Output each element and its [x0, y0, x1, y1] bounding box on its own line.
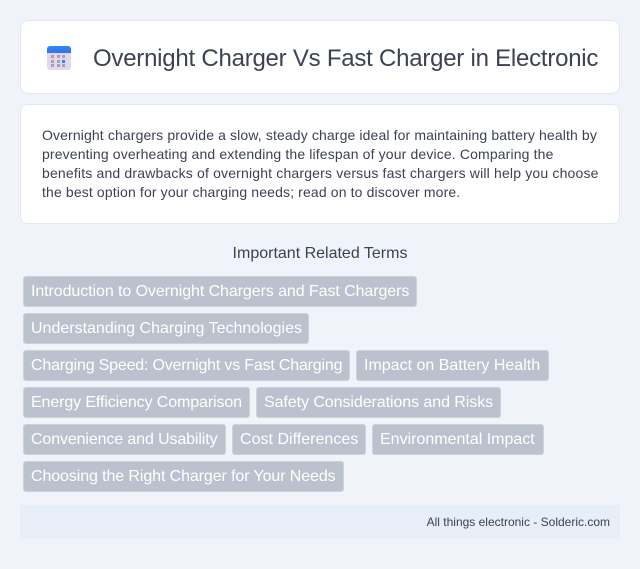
tag: Safety Considerations and Risks: [264, 394, 493, 411]
tag: [356, 350, 549, 381]
tag: Energy Efficiency Comparison: [31, 394, 242, 411]
tag: [232, 424, 366, 455]
tag: [23, 276, 417, 307]
panel: header: [20, 20, 620, 94]
tag: Introduction to Overnight Chargers and Fast Chargers: [31, 283, 409, 300]
tag list: [23, 276, 549, 492]
tag: [23, 461, 344, 492]
tag: Convenience and Usability: [31, 431, 217, 448]
heading: related terms: Important Related Terms: [233, 245, 407, 262]
intro text: the best option for your charging needs; read on to discover more.: [42, 184, 460, 200]
tag: [23, 424, 226, 455]
tag: [23, 350, 350, 381]
icon: calendar: [47, 46, 71, 70]
tag: [256, 387, 501, 418]
tag: Understanding Charging Technologies: [31, 320, 302, 337]
tag: Charging Speed: Overnight vs Fast Charging: [31, 357, 342, 374]
intro text: benefits and drawbacks of overnight chargers versus fast chargers will help you choose: [42, 165, 599, 181]
footer: All things electronic - Solderic.com: [427, 515, 610, 529]
intro text: Overnight chargers provide a slow, steady charge ideal for maintaining battery health by: [42, 127, 597, 143]
panel: introduction: [20, 104, 620, 224]
footer: [20, 505, 620, 539]
tag: [23, 313, 309, 344]
intro text: preventing overheating and extending the lifespan of your device. Comparing the: [42, 146, 554, 162]
tag: Impact on Battery Health: [364, 357, 540, 374]
title: Overnight Charger Vs Fast Charger in Electronic: [93, 45, 598, 72]
tag: Choosing the Right Charger for Your Needs: [31, 468, 336, 485]
tag: Environmental Impact: [380, 431, 535, 448]
tag: [372, 424, 544, 455]
intro text: [42, 127, 599, 200]
tag: [23, 387, 250, 418]
tag: Cost Differences: [240, 431, 358, 448]
